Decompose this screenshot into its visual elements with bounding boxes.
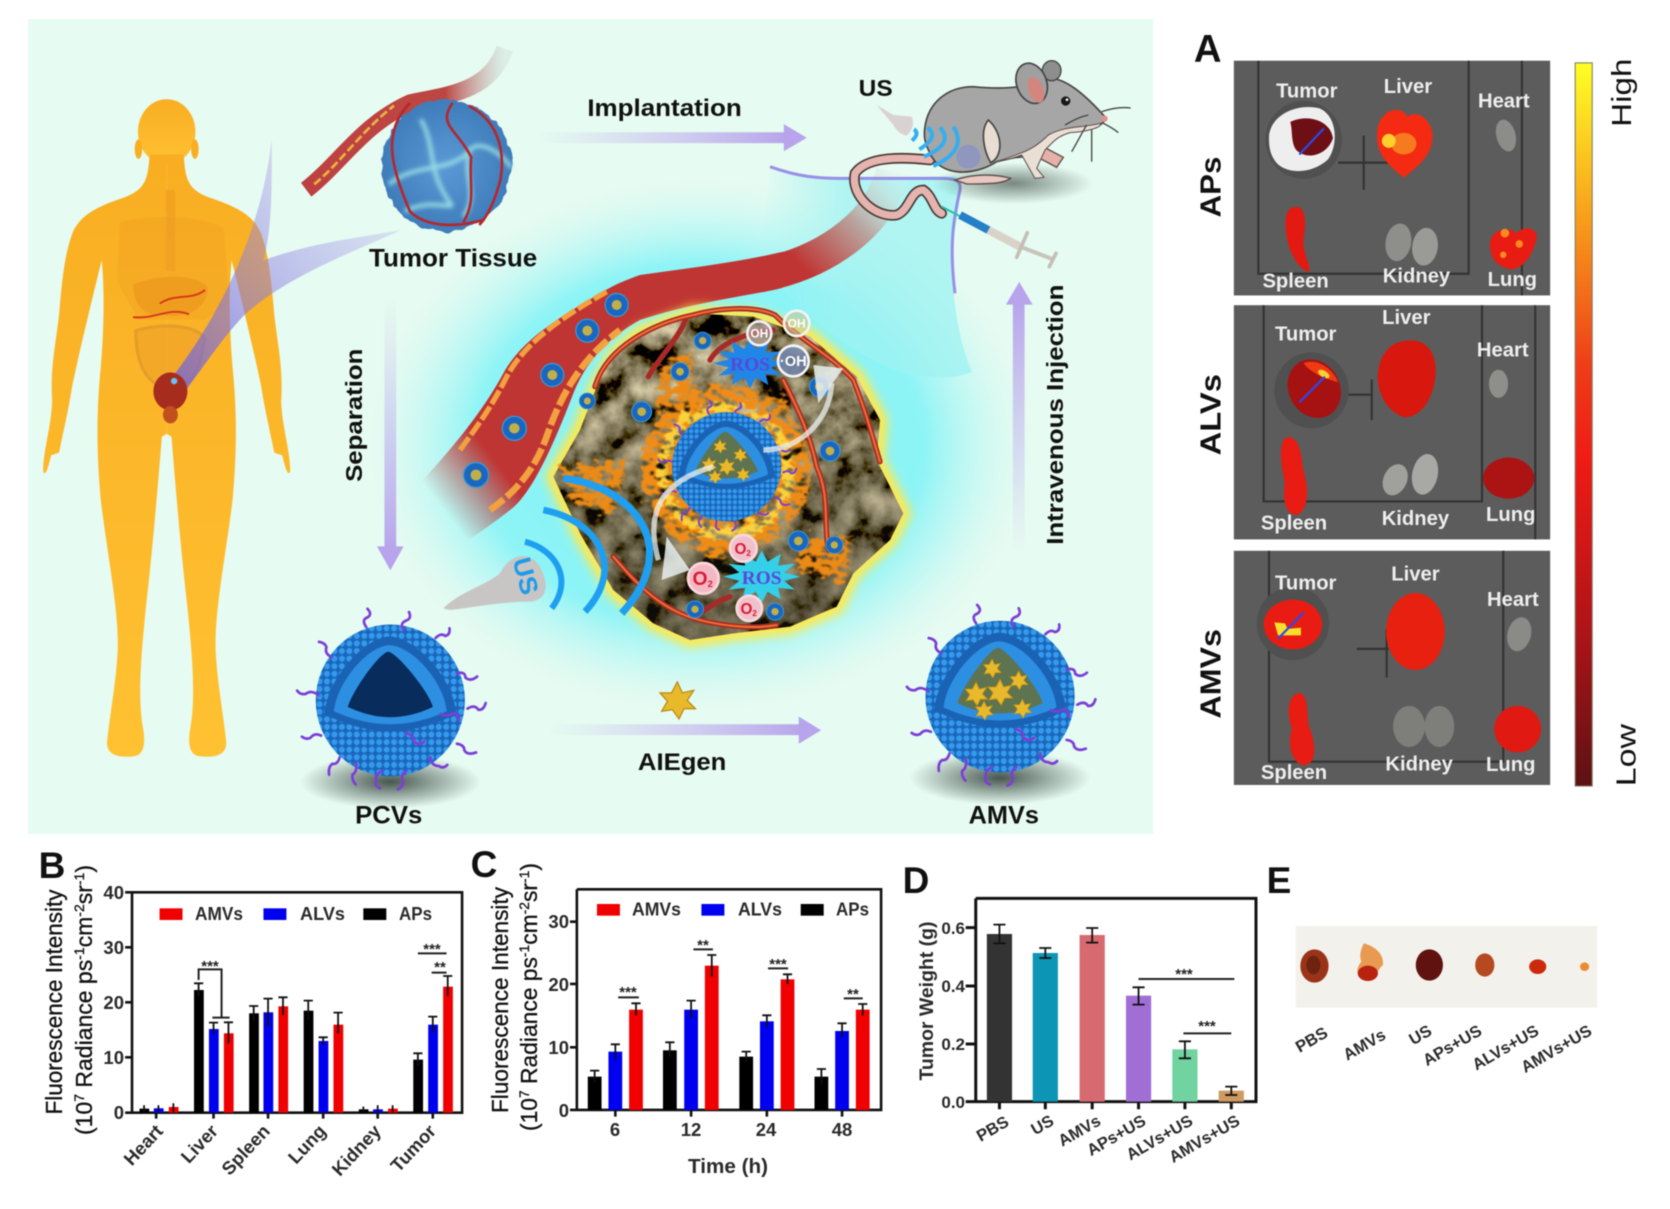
chart C: fluorescence over time: 48: [832, 1119, 852, 1140]
label: PCVs: PCVs: [355, 802, 422, 830]
ROS bursts: ROS: [730, 355, 770, 376]
chart B y-axis label: [41, 865, 97, 1135]
chart C y-axis label: (10: [516, 1098, 542, 1131]
nanoparticles: [463, 293, 843, 620]
ultrasound probe: US: [507, 555, 543, 598]
chart B: organ fluorescence: Liver: [176, 1120, 222, 1167]
row label AMVs: AMVs: [1196, 629, 1227, 719]
syringe: [942, 207, 1056, 267]
chart C y-axis label: Radiance ps: [516, 957, 542, 1090]
label: AIEgen: AIEgen: [638, 750, 726, 776]
chart B y-axis label: Fluorescence Intensity: [41, 889, 67, 1114]
panel letter C: C: [471, 844, 497, 885]
label: High: High: [1606, 59, 1637, 127]
chart C y-axis label: sr: [516, 883, 542, 902]
chart D: tumor weight: [941, 898, 1256, 1167]
chart B y-axis label: -1: [71, 872, 87, 885]
panel letter A: A: [1194, 27, 1222, 71]
chart B: organ fluorescence: Kidney: [327, 1120, 385, 1180]
OH and singlet oxygen bubbles: 2: [708, 579, 713, 589]
ultrasound probe: [443, 478, 650, 613]
panel letter B: B: [39, 845, 65, 886]
imaging panel: ALVs: Spleen: [1261, 512, 1327, 535]
chart D: tumor weight: ***: [1175, 966, 1193, 983]
arrow: AIEgen: [548, 717, 821, 744]
chart C y-axis label: [487, 863, 542, 1131]
chart C y-axis label: -2: [516, 902, 532, 914]
photo labels: APs+US: [1420, 1022, 1485, 1070]
cyan glow: [370, 180, 1030, 710]
human body silhouette: [43, 99, 290, 757]
imaging panel: AMVs: Lung: [1486, 754, 1535, 776]
OH and singlet oxygen bubbles: O: [740, 601, 752, 618]
chart B: organ fluorescence: 0: [114, 1102, 124, 1123]
chart B: organ fluorescence: APs: [399, 904, 432, 924]
ROS bursts: [713, 338, 800, 603]
chart D: tumor weight: PBS: [974, 1113, 1012, 1145]
chart B y-axis label: cm: [71, 917, 97, 947]
chart C: fluorescence over time: ***: [619, 984, 637, 1001]
chart C: fluorescence over time: ALVs: [738, 900, 782, 920]
mouse body: [924, 59, 1131, 184]
chart D: tumor weight: ***: [1198, 1018, 1216, 1035]
chart C: fluorescence over time: [548, 889, 881, 1178]
OH and singlet oxygen bubbles: O: [693, 569, 708, 590]
label: Tumor Tissue: Tumor Tissue: [369, 246, 537, 273]
row label ALVs: ALVs: [1196, 374, 1227, 455]
OH and singlet oxygen bubbles: 2: [752, 609, 757, 618]
photo labels: AMVs+US: [1518, 1022, 1595, 1077]
imaging panel: AMVs: Heart: [1487, 589, 1539, 611]
light beam from pelvic tumor to tumor tissue: [170, 140, 400, 393]
imaging panel: AMVs: Spleen: [1261, 762, 1327, 784]
chart B: organ fluorescence: AMVs: [195, 904, 243, 924]
OH and singlet oxygen bubbles: O: [734, 541, 746, 558]
imaging panel: AMVs: Kidney: [1385, 753, 1454, 775]
ultrasound probe and waves: [877, 105, 958, 166]
tumor tissue vessel and mass: [306, 49, 511, 231]
label: US: US: [859, 75, 893, 101]
label: Implantation: Implantation: [587, 96, 742, 122]
chart C: fluorescence over time: ***: [769, 956, 787, 973]
imaging panel: ALVs: Tumor: [1275, 323, 1336, 345]
chart B y-axis label: ): [71, 865, 97, 873]
imaging panel: APs: Heart: [1478, 90, 1530, 112]
chart D: tumor weight: 0.2: [941, 1035, 965, 1054]
chart B: organ fluorescence: ALVs: [300, 904, 345, 924]
chart C: fluorescence over time: **: [697, 937, 709, 954]
chart C: fluorescence over time: 6: [610, 1119, 620, 1140]
chart C: fluorescence over time: 10: [548, 1037, 569, 1058]
panel letter E: E: [1267, 860, 1291, 901]
chart C y-axis label: -1: [516, 945, 532, 957]
chart C: fluorescence over time: 12: [681, 1119, 701, 1140]
imaging panel: APs: Spleen: [1262, 270, 1329, 292]
chart C: fluorescence over time: 0: [559, 1100, 569, 1121]
imaging panel: APs: Tumor: [1276, 80, 1338, 103]
panel letter D: D: [903, 860, 929, 901]
tumor glow: [553, 313, 903, 640]
ROS bursts: ROS: [742, 568, 782, 589]
chart C: fluorescence over time: APs: [836, 900, 869, 920]
PCV vesicle: [297, 609, 486, 809]
chart C: fluorescence over time: 30: [548, 911, 569, 932]
pelvic tumor: [153, 372, 187, 423]
chart B: organ fluorescence: 30: [103, 937, 124, 958]
chart B: organ fluorescence: Tumor: [386, 1120, 440, 1176]
chart B y-axis label: (10: [71, 1102, 97, 1135]
OH and singlet oxygen bubbles: OH: [788, 317, 806, 331]
cyan beam region under the mouse: [760, 167, 972, 378]
schematic artwork right half and panel A: [907, 27, 1641, 830]
chart B y-axis label: -2: [71, 904, 87, 917]
arrow: separation: [377, 298, 404, 570]
row label APs: APs: [1196, 157, 1227, 217]
chart B: organ fluorescence: Spleen: [217, 1120, 274, 1179]
chart B: organ fluorescence: ***: [423, 941, 441, 958]
tumor blood vessels: [595, 309, 880, 627]
photo labels: AMVs: [1340, 1026, 1389, 1064]
schematic artwork left half: [43, 49, 821, 830]
photo labels: [1293, 1022, 1595, 1077]
chart C y-axis label: 7: [516, 1090, 532, 1098]
label: Intravenous Injection: Intravenous Injection: [1043, 285, 1069, 545]
chart B: organ fluorescence: Lung: [284, 1120, 330, 1168]
flames: [560, 353, 853, 580]
OH and singlet oxygen bubbles: 2: [746, 549, 751, 558]
OH and singlet oxygen bubbles: OH: [750, 327, 768, 341]
label: Separation: Separation: [342, 349, 368, 482]
panel: schematic background: [28, 19, 1153, 834]
chart C y-axis label: ): [516, 863, 542, 871]
imaging panel: ALVs: Kidney: [1382, 508, 1450, 530]
purple connector curves: [770, 167, 960, 293]
chart B: organ fluorescence: ***: [201, 958, 219, 975]
central blood vessel: [420, 252, 783, 543]
imaging panel: AMVs: Tumor: [1275, 572, 1336, 594]
chart D y-axis label: Tumor Weight (g): [917, 922, 938, 1080]
imaging panel: AMVs: Liver: [1391, 563, 1440, 586]
chart B: organ fluorescence: 20: [103, 992, 124, 1013]
chart D: tumor weight: AMVs+US: [1166, 1112, 1243, 1167]
chart D: tumor weight: APs+US: [1084, 1112, 1149, 1160]
chart D: tumor weight: 0.6: [941, 919, 965, 938]
chart C: fluorescence over time: Time (h): [688, 1156, 768, 1178]
chart C y-axis label: -1: [516, 870, 532, 883]
imaging panel: ALVs: Lung: [1486, 504, 1535, 526]
imaging panel: APs: [1234, 61, 1550, 295]
chart D: tumor weight: 0.0: [941, 1093, 965, 1112]
chart B: organ fluorescence: 40: [103, 882, 124, 903]
chart B: organ fluorescence: Heart: [119, 1120, 167, 1169]
AMV vesicle: [907, 605, 1095, 805]
imaging panel: APs: Kidney: [1383, 265, 1451, 287]
mouse scene: [770, 59, 1131, 293]
central tumor scene: [420, 252, 903, 640]
colour scale bar: [1575, 63, 1592, 786]
chart D: tumor weight: US: [1028, 1112, 1057, 1139]
chart D: tumor weight: 0.4: [941, 977, 966, 996]
imaging panel: ALVs: Liver: [1382, 307, 1431, 329]
internal organs: [117, 190, 229, 390]
chart B y-axis label: Radiance ps: [71, 960, 97, 1094]
arrow: implantation: [538, 124, 807, 151]
photo of excised tumors: [1296, 926, 1597, 1008]
chart D: tumor weight: ALVs+US: [1123, 1112, 1196, 1164]
chart C: fluorescence over time: 24: [756, 1119, 777, 1140]
upper vessel fading toward the mouse: [775, 172, 893, 272]
chart B: organ fluorescence: [103, 882, 462, 1180]
photo labels: PBS: [1293, 1024, 1331, 1056]
icon: AIEgen star: [660, 682, 695, 719]
OH and singlet oxygen bubbles: [688, 311, 809, 621]
chart B y-axis label: -1: [71, 947, 87, 960]
chart C y-axis label: Fluorescence Intensity: [487, 887, 513, 1113]
OH and singlet oxygen bubbles: ·OH: [780, 354, 807, 370]
tumor mass: [463, 293, 903, 640]
imaging panel: ALVs: Heart: [1477, 340, 1529, 362]
imaging panel: AMVs: [1234, 551, 1550, 785]
chart B: organ fluorescence: 10: [103, 1047, 124, 1068]
chart C y-axis label: cm: [516, 914, 542, 945]
photo labels: US: [1406, 1022, 1435, 1049]
mouse shadow: [933, 163, 1093, 204]
white curved arrows: [654, 365, 843, 580]
label: Low: Low: [1611, 723, 1641, 786]
imaging panel: ALVs: [1234, 305, 1550, 539]
chart B y-axis label: sr: [71, 885, 97, 904]
chart B y-axis label: 7: [71, 1094, 87, 1102]
mouse tail: [854, 158, 942, 215]
central AMV vesicle: [658, 401, 796, 531]
arrow: intravenous injection: [1006, 282, 1033, 553]
chart B: organ fluorescence: **: [434, 959, 446, 976]
chart C: fluorescence over time: **: [847, 986, 859, 1003]
chart C: fluorescence over time: AMVs: [632, 900, 681, 920]
photo labels: ALVs+US: [1469, 1022, 1542, 1074]
label: AMVs: AMVs: [969, 802, 1039, 830]
imaging panel: APs: Lung: [1488, 269, 1537, 291]
imaging panel: APs: Liver: [1384, 76, 1432, 98]
chart C: fluorescence over time: 20: [548, 974, 569, 995]
chart D: tumor weight: AMVs: [1055, 1112, 1104, 1150]
